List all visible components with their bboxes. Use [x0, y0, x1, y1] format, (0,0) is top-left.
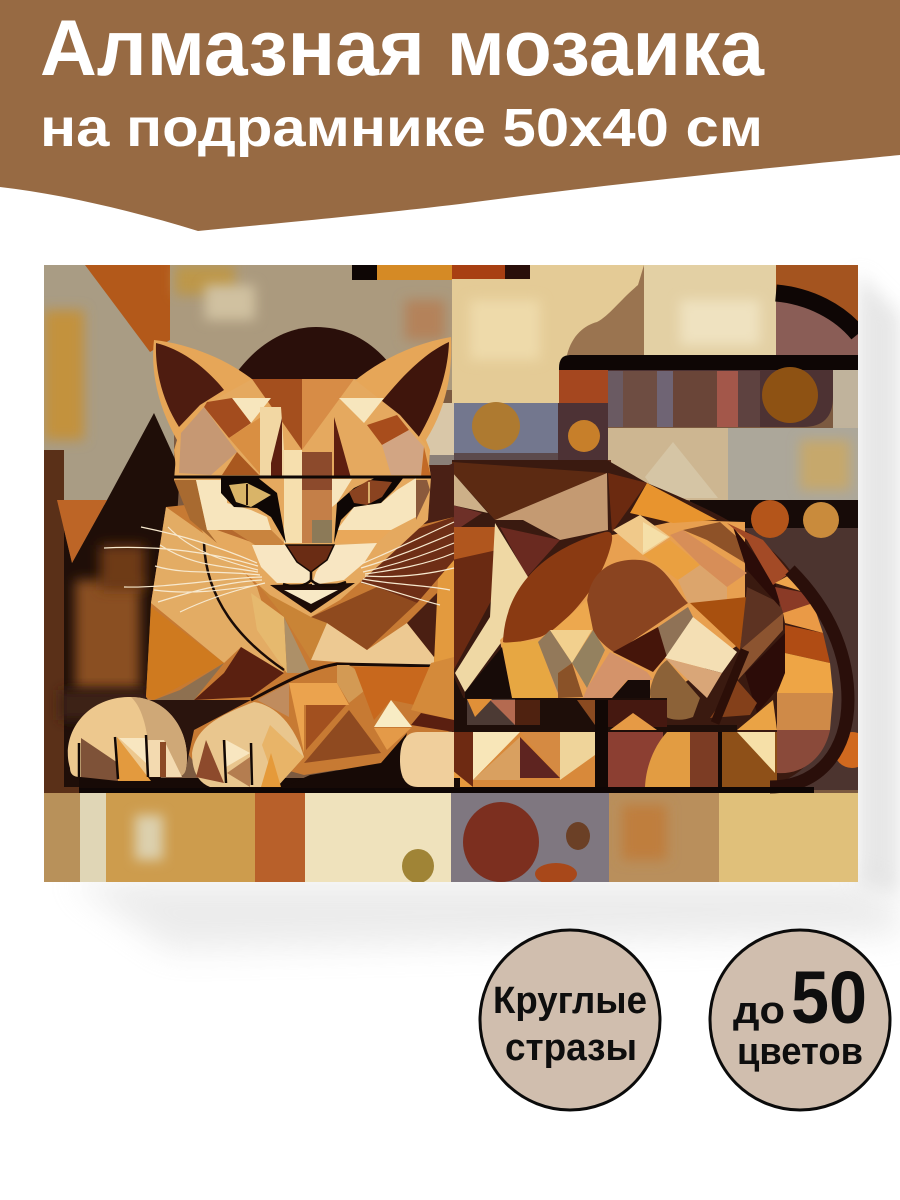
nose [286, 545, 334, 572]
badge: round rhinestones: стразы [505, 1027, 637, 1069]
cat chest and neck [146, 463, 454, 770]
front legs and paws [68, 657, 460, 788]
eye right [334, 477, 404, 543]
canvas painting: abstract cat [44, 265, 870, 885]
canvas drop shadow [70, 272, 900, 950]
mouth [283, 572, 346, 586]
painting background blocks [44, 265, 858, 793]
cat body [452, 460, 833, 787]
badge: up to 50 colours: 50 [791, 956, 867, 1039]
whiskers [104, 522, 454, 612]
badge: up to 50 colours: цветов [737, 1031, 863, 1073]
cat head [153, 337, 451, 617]
badge: round rhinestones: Круглые [493, 980, 647, 1022]
muzzle [252, 543, 377, 585]
subtitle: на подрамнике 50х40 см [40, 98, 763, 158]
title: Алмазная мозаика [40, 3, 765, 92]
cream haunch block [400, 732, 454, 787]
badge: up to 50 colours [710, 930, 890, 1110]
bottom band blocks [44, 793, 858, 885]
paw right [192, 702, 304, 787]
ear left [153, 340, 252, 464]
lower row of triangle tiles [44, 570, 848, 793]
header banner [0, 0, 900, 231]
badge: up to 50 colours: до [733, 990, 785, 1032]
paw left [68, 697, 187, 781]
badge: round rhinestones [480, 930, 660, 1110]
eye left [221, 477, 286, 543]
face [174, 379, 431, 617]
ear right [356, 337, 452, 464]
